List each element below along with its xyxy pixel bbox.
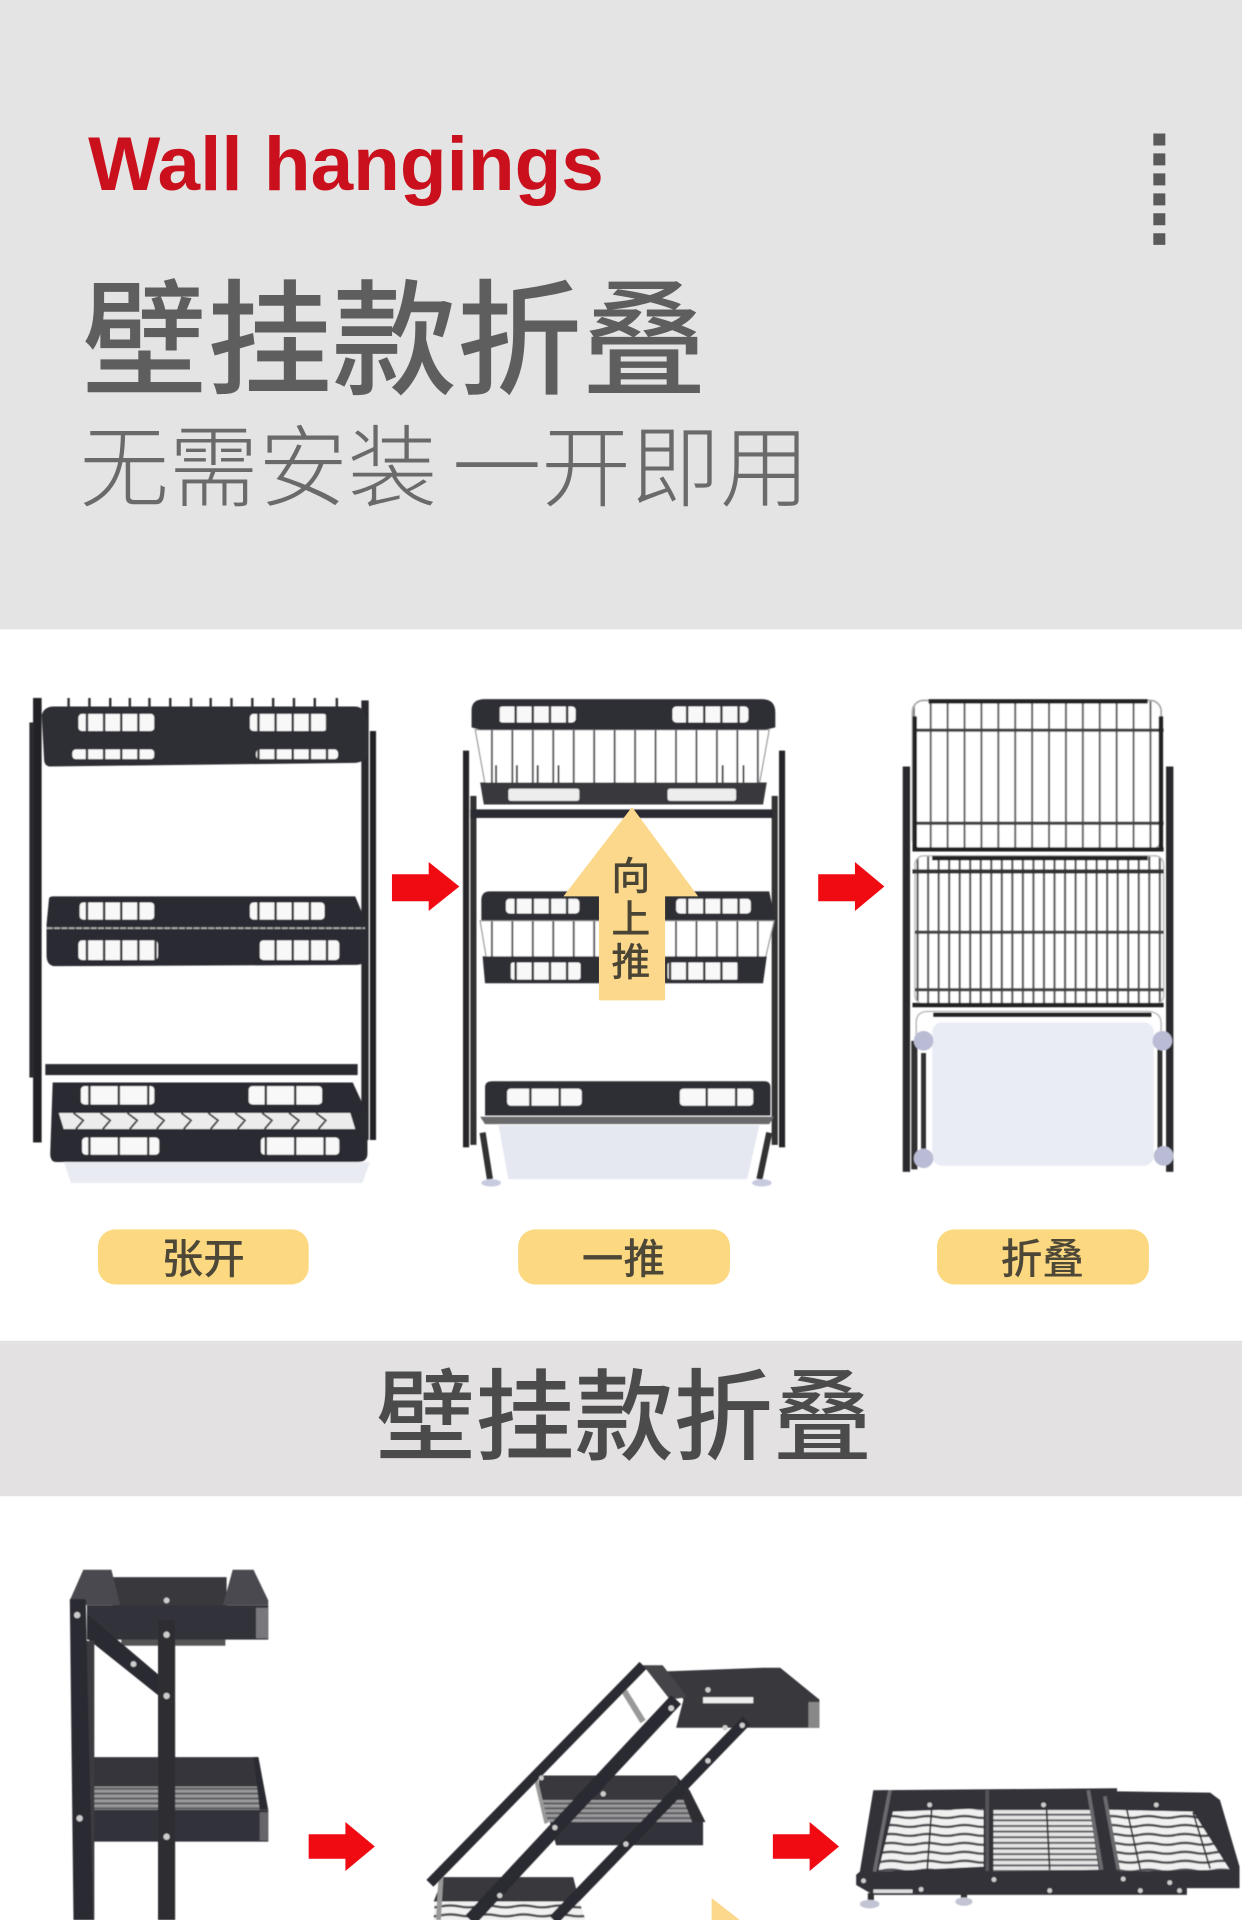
product: side view tilted [430,1665,819,1920]
arrow: tilted to flat [773,1822,839,1871]
product: rack opened [29,698,376,1183]
panel: header background [0,0,1242,629]
arrow: pushed to folded [818,862,884,911]
label pill: 一推: 一推 [582,1235,665,1282]
product: rack being pushed [463,699,785,1187]
subheading: 无需安装 一开即用: 一开即用 [452,419,810,519]
title: Wall hangings: Wall hangings [88,122,604,207]
heading: 壁挂款折叠: 壁挂款折叠 [82,273,707,411]
label: 向上推: 向 [611,856,650,899]
label: 向上推: 上 [611,899,650,942]
arrow: upright to tilted [309,1822,375,1871]
arrow: push upward with label [563,807,698,1000]
arrow: opened to pushed [392,862,459,911]
label: 向上推: 推 [611,942,650,985]
product: side view folded flat [856,1788,1240,1908]
heading: 壁挂款折叠 band title: 壁挂款折叠 [376,1363,872,1474]
subheading: 无需安装 一开即用: 无需安装 [80,419,437,519]
panel: side-view folding sequence [0,1496,1242,1920]
label pill: 折叠 [937,1229,1149,1284]
label pill: 一推 [518,1229,730,1284]
decorative dotted marker [1154,133,1164,245]
product: rack folded [903,699,1173,1172]
label pill: 张开: 张开 [162,1235,245,1282]
panel: section band [0,1341,1242,1496]
label pill: 张开 [98,1229,309,1284]
product: side view upright [70,1570,268,1920]
panel: folding steps [0,629,1242,1341]
label pill: 折叠: 折叠 [1001,1235,1084,1282]
arrow fragment: yellow tip [712,1898,740,1920]
